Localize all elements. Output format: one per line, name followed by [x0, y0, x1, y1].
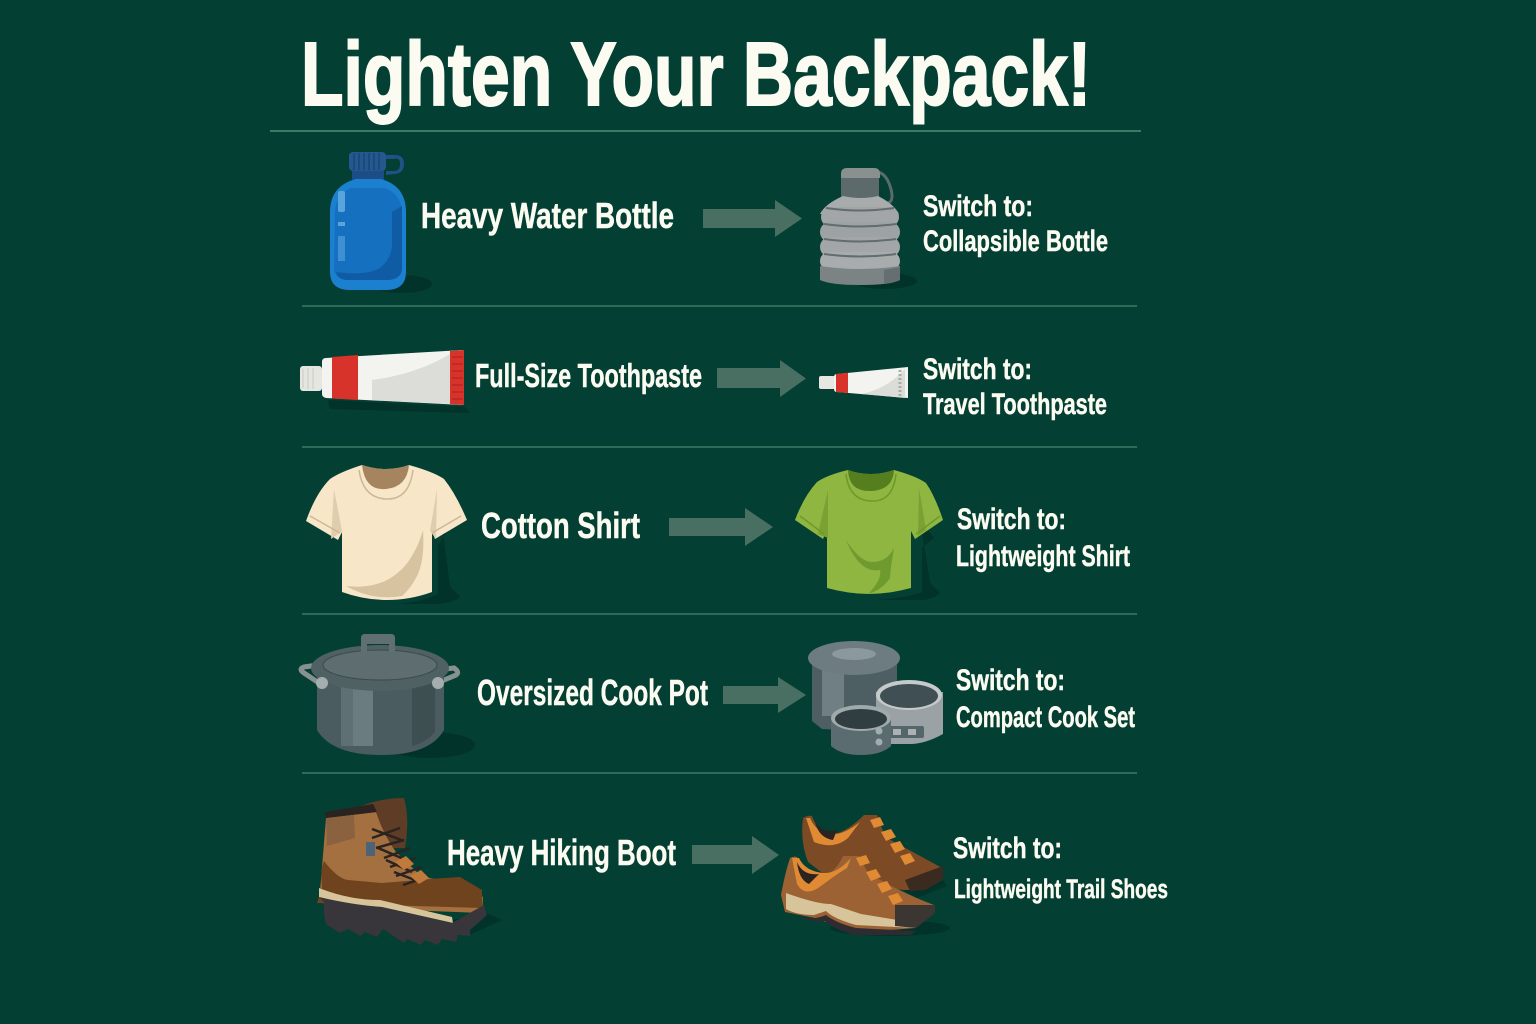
icon: full-size toothpaste [300, 350, 470, 413]
icon: heavy hiking boot [317, 798, 502, 945]
icon: compact cook set [808, 641, 943, 755]
icon: heavy water bottle [330, 152, 432, 293]
front shoe [781, 856, 934, 933]
arrow [723, 677, 806, 713]
switch text: lightweight shirt: Lightweight Shirt [956, 540, 1130, 573]
switch text: compact cook set: Switch to: [956, 664, 1065, 697]
icon: oversized cook pot [301, 634, 475, 758]
arrow [703, 200, 802, 237]
switch text: lightweight trail shoes: Lightweight Trail Shoes [954, 874, 1168, 904]
switch text: travel toothpaste [923, 353, 1107, 421]
panel: toothpaste row [300, 350, 1107, 421]
arrow [669, 508, 773, 546]
panel: cook pot row [301, 634, 1135, 758]
icon: lightweight trail shoes [781, 815, 950, 936]
label: oversized cook pot: Oversized Cook Pot [477, 672, 708, 713]
switch text: travel toothpaste: Travel Toothpaste [923, 388, 1107, 421]
icon: lightweight shirt [795, 470, 943, 600]
switch text: lightweight shirt [956, 503, 1130, 573]
icon: travel toothpaste [819, 367, 908, 398]
switch text: collapsible bottle: Switch to: [923, 190, 1033, 223]
label: full-size toothpaste: Full-Size Toothpaste [475, 357, 702, 394]
label: heavy hiking boot: Heavy Hiking Boot [447, 832, 676, 873]
panel: boot row [317, 798, 1168, 945]
back shoe [802, 815, 947, 898]
switch text: lightweight trail shoes: Switch to: [953, 832, 1062, 865]
arrow [717, 360, 806, 397]
switch text: travel toothpaste: Switch to: [923, 353, 1032, 386]
switch text: lightweight shirt: Switch to: [957, 503, 1066, 536]
panel: shirt row [306, 465, 1130, 604]
switch text: compact cook set [956, 664, 1135, 734]
icon: collapsible bottle [820, 168, 917, 289]
switch text: collapsible bottle: Collapsible Bottle [923, 225, 1108, 258]
switch text: collapsible bottle [923, 190, 1108, 258]
label: heavy water bottle: Heavy Water Bottle [421, 195, 674, 236]
switch text: lightweight trail shoes [953, 832, 1168, 904]
switch text: compact cook set: Compact Cook Set [956, 701, 1135, 734]
panel: water bottle row [330, 152, 1108, 293]
icon: cotton shirt [306, 465, 467, 604]
title: Lighten Your Backpack! [301, 25, 1091, 125]
arrow [692, 836, 779, 874]
label: cotton shirt: Cotton Shirt [481, 505, 640, 546]
